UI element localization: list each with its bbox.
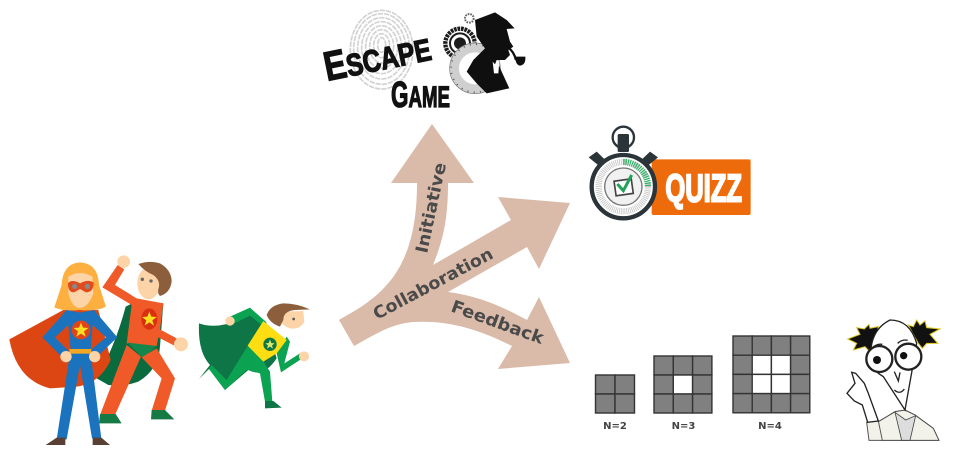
arrow: feedback <box>354 292 570 369</box>
hair <box>848 324 878 351</box>
pipe <box>508 48 516 60</box>
grid labels: N=3 <box>672 421 695 432</box>
grid n=3 <box>654 356 712 413</box>
hand <box>847 372 878 422</box>
grid labels: N=4 <box>758 421 782 432</box>
orange banner <box>652 159 751 215</box>
chart: square grids <box>596 336 810 413</box>
sleeve <box>867 421 882 440</box>
crown <box>613 127 634 148</box>
collar <box>484 52 499 73</box>
head <box>870 320 917 410</box>
small gear <box>465 14 474 23</box>
label: feedback: Feedback <box>448 297 547 349</box>
grid labels <box>603 421 782 432</box>
fingerprint <box>350 10 413 89</box>
grid labels: N=2 <box>603 421 627 432</box>
icon: escape game logo <box>320 10 525 115</box>
silhouette <box>467 12 515 93</box>
grid n=2 <box>596 375 634 413</box>
label: initiative: Initiative <box>412 161 451 255</box>
arrow: initiative <box>339 124 474 340</box>
arrows diagram <box>339 124 570 369</box>
coat <box>878 410 939 440</box>
arrow: collaboration <box>339 197 570 346</box>
icon: scientist <box>847 320 940 440</box>
game text: GAME <box>391 74 450 115</box>
stopwatch body <box>592 155 655 218</box>
label: collaboration: Collaboration <box>370 244 497 324</box>
icon: quiz stopwatch badge <box>589 127 751 218</box>
detective emblem <box>445 12 525 94</box>
side buttons <box>589 152 658 167</box>
hero: green runner <box>199 303 310 408</box>
face lines <box>872 340 908 392</box>
icon: superheroes <box>9 255 310 445</box>
quizz text: QUIZZ <box>665 167 742 211</box>
escape text: ESCAPE <box>320 23 435 90</box>
large gear <box>445 29 475 58</box>
hero: blue woman <box>9 262 117 445</box>
hero: orange man <box>97 255 188 423</box>
checkbox <box>614 179 633 196</box>
clock <box>454 48 496 89</box>
grid n=4 <box>733 336 810 413</box>
glasses <box>866 346 892 372</box>
